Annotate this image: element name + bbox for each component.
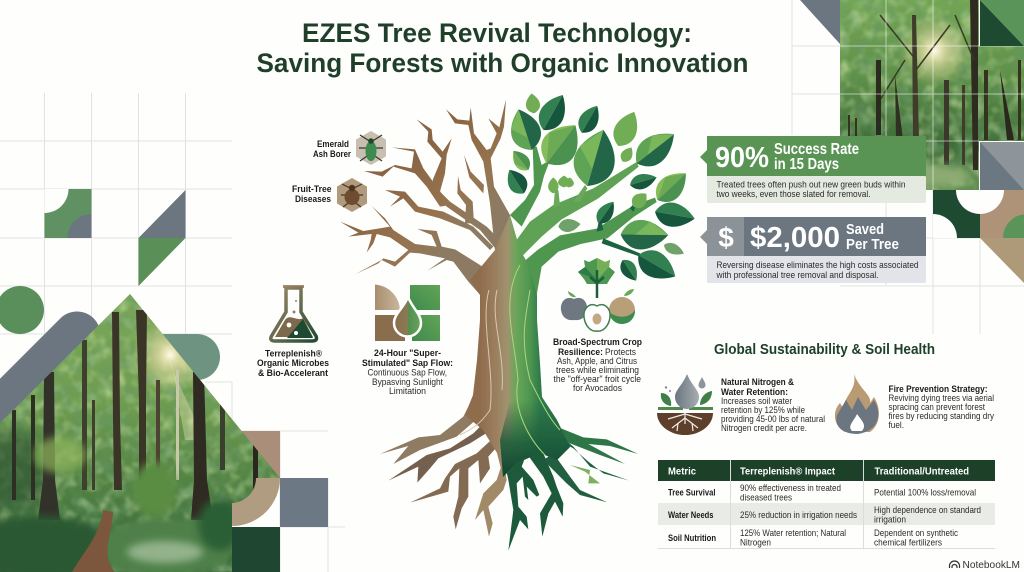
top right triangles (980, 0, 1024, 46)
stat card: success rate: two weeks, even those slated for removal. (716, 189, 870, 199)
stat card: savings: Saved (846, 221, 884, 238)
comparison table: Metric (668, 466, 696, 478)
left decorative grid lines (0, 93, 345, 572)
stat card: savings: $2,000 (750, 222, 840, 254)
icon and label: crop resilience: Resilience: (558, 346, 603, 357)
gray tile right (980, 142, 1024, 190)
dark green tile right (933, 190, 980, 238)
icon and label: crop resilience: the "off-year" froit cycle (554, 374, 641, 384)
label: emerald ash borer: Emerald (317, 138, 349, 149)
NotebookLM logo: NotebookLM (962, 560, 1020, 571)
title (256, 18, 748, 78)
stat card: success rate: 90% (715, 142, 769, 174)
comparison table: Soil Nutrition (668, 532, 716, 543)
comparison table: Water Needs (668, 509, 714, 520)
text: fire prevention: spracing can prevent forest (888, 402, 985, 412)
icon and label: organic microbes: & Bio-Accelerant (258, 367, 328, 378)
text: natural nitrogen: retention by 125% while (721, 405, 805, 415)
decorative sage half pill (150, 334, 220, 380)
decorative green circle (0, 286, 44, 334)
text: fire prevention: Reviving dying trees via aerial (888, 393, 994, 403)
icon and label: sap flow: Limitation (389, 386, 426, 396)
icon and label: sap flow: Bypasving Sunlight (372, 377, 443, 387)
decorative triangles (138, 190, 186, 286)
icon and label: crop resilience: Ash, Apple, and Citrus (557, 356, 637, 366)
comparison table: Potential 100% loss/removal (874, 488, 976, 498)
label: emerald ash borer: Ash Borer (313, 148, 351, 159)
text: fire prevention: Fire Prevention Strategy: (888, 383, 988, 394)
icon and label: crop resilience: trees while eliminating (556, 365, 639, 375)
leaves (501, 89, 697, 288)
text: natural nitrogen: providing 45-00 lbs of natural (721, 414, 825, 424)
stat card: savings: $ (718, 222, 734, 253)
dead brown branches (340, 99, 517, 303)
brown tile (232, 431, 280, 478)
roots (380, 397, 638, 551)
label: fruit-tree diseases (292, 178, 367, 212)
comparison table: Tree Survival (668, 486, 716, 498)
icon and label: crop resilience (553, 258, 642, 393)
icon and label: organic microbes (257, 286, 329, 378)
icon and label: organic microbes: Terreplenish® (265, 348, 322, 358)
title: EZES Tree Revival Technology: (302, 18, 692, 48)
stat card: success rate: Treated trees often push out new green buds within (716, 180, 906, 190)
top right decorative grid lines (792, 0, 1024, 334)
forest photo panel: top right (840, 0, 1024, 190)
comparison table: 125% Water retention; Natural (740, 528, 846, 538)
comparison table: 25% reduction in irrigation needs (740, 510, 857, 520)
icon and label: sap flow: Stimulated" Sap Flow: (362, 357, 453, 368)
text: natural nitrogen (721, 376, 825, 433)
dark green tile (232, 527, 280, 572)
icon: water drop, plants and soil (657, 374, 713, 435)
comparison table: High dependence on standard (874, 505, 981, 515)
icon and label: crop resilience: for Avocados (573, 383, 622, 393)
title: Saving Forests with Organic Innovation (256, 48, 748, 78)
decorative gray pill (0, 335, 77, 452)
icon and label: organic microbes: Organic Microbes (257, 357, 329, 368)
label: fruit-tree diseases: Fruit-Tree (292, 183, 332, 194)
label: fruit-tree diseases: Diseases (295, 193, 331, 204)
forest photo panel: left (0, 290, 290, 572)
text: natural nitrogen: Increases soil water (721, 396, 792, 406)
comparison table (658, 460, 995, 548)
decorative tile: green with quarter circles (44, 189, 92, 238)
comparison table: chemical fertilizers (874, 538, 942, 548)
comparison table: Traditional/Untreated (874, 466, 969, 478)
stat card: savings (700, 217, 926, 283)
sap lines (460, 265, 560, 455)
gray tile (280, 478, 328, 527)
text: natural nitrogen: Water Retention: (721, 386, 788, 397)
comparison table: diseased trees (740, 492, 792, 502)
tan triangle right (980, 238, 1024, 283)
stat card: success rate: in 15 Days (774, 156, 839, 173)
stat card: savings: Reversing disease eliminates the high costs associated (716, 260, 918, 270)
heading: global sustainability: Global Sustainability & Soil Health (714, 342, 935, 358)
comparison table: 90% effectiveness in treated (740, 483, 841, 493)
comparison table: Dependent on synthetic (874, 528, 958, 538)
tan tile right (980, 190, 1024, 238)
text: fire prevention (888, 383, 994, 430)
tan ring tile (232, 478, 280, 526)
icon and label: sap flow: 24-Hour "Super- (374, 347, 441, 358)
icon and label: crop resilience: Broad-Spectrum Crop (553, 336, 642, 347)
trunk (465, 215, 570, 477)
text: fire prevention: fires by reducing standing dry (888, 411, 994, 421)
stat card: savings: Per Tree (846, 236, 899, 253)
gray corner triangle (800, 0, 840, 44)
comparison table: Nitrogen (740, 538, 771, 548)
icon and label: crop resilience: Protects (605, 347, 636, 357)
text: fire prevention: fuel. (888, 420, 904, 430)
icon: flame (835, 374, 879, 434)
text: natural nitrogen: Nitrogen credit per acre. (721, 423, 807, 433)
comparison table: Terreplenish® Impact (740, 466, 835, 478)
icon and label: sap flow: Continuous Sap Flow, (368, 368, 447, 378)
text: natural nitrogen: Natural Nitrogen & (721, 376, 794, 387)
white half circle (956, 190, 1004, 214)
stat card: savings: with professional tree removal and disposal. (716, 270, 878, 280)
living green branches (510, 147, 657, 297)
stat card: success rate (700, 136, 926, 203)
label: emerald ash borer (313, 131, 386, 165)
icon and label: sap flow (362, 284, 453, 396)
comparison table: irrigation (874, 514, 906, 524)
stat card: success rate: Success Rate (774, 141, 859, 158)
central tree illustration (340, 89, 697, 551)
